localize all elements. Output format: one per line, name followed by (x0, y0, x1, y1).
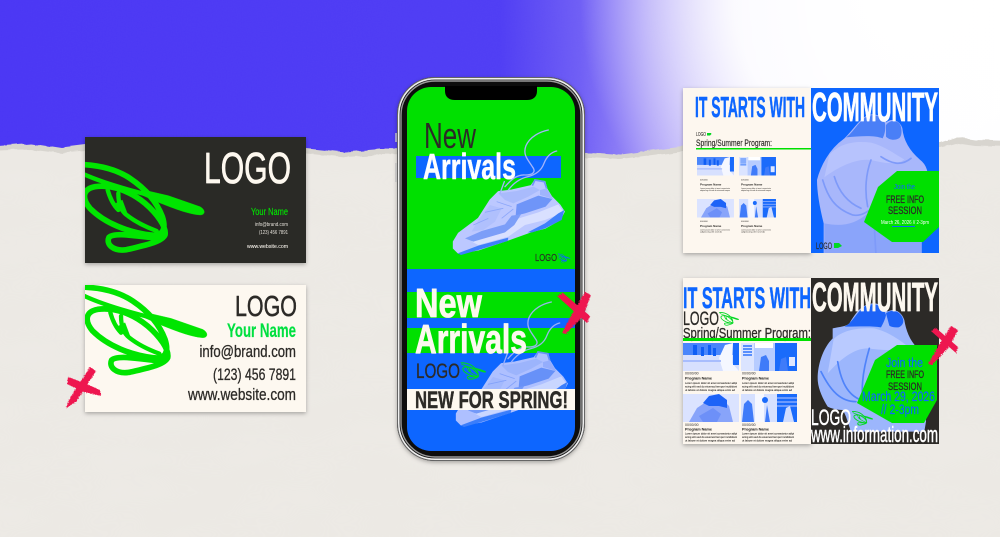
program listings: adipiscing elit sed do eiusmod tempor (700, 189, 730, 192)
program listings: 00/00/00 (700, 180, 709, 182)
program listings: Program Name (741, 182, 763, 186)
program listings: adipiscing elit sed do eiusmod tempor (741, 189, 771, 192)
program listings: ut labore et dolore magna aliqua enim ad (742, 388, 792, 392)
text: new for spring: NEW FOR SPRING! (415, 387, 568, 414)
shoe (453, 130, 564, 255)
contact text: dark card (246, 207, 288, 250)
icon: red x, phone (557, 292, 591, 334)
program listings: scing elit sed do eiusmod tempor incididunt (742, 435, 794, 439)
photo: embracing couple (818, 303, 926, 432)
right page (810, 274, 939, 447)
business card: light (78, 285, 306, 412)
icon: green scribble (720, 312, 739, 325)
program listings: Lorem ipsum dolor sit amet consectetur (741, 228, 771, 232)
program thumbnails (683, 343, 797, 422)
program listings: scing elit sed do eiusmod tempor incididunt (685, 435, 737, 439)
left page: IT STARTS WITH (695, 92, 805, 124)
heading: New: New (415, 280, 482, 326)
heading: Arrivals: Arrivals (423, 146, 516, 187)
callout: info session: SESSION (888, 381, 922, 393)
program listings: Program Name (700, 224, 722, 228)
contact text: dark card: Your Name (251, 207, 288, 218)
logo: LOGO (816, 241, 832, 251)
logo: LOGO (696, 132, 706, 138)
heading: New: New (424, 115, 477, 156)
program listings: Program Name (742, 428, 769, 432)
program listings: Lorem ipsum dolor sit amet consectetur adipi (685, 432, 737, 436)
callout: info session: // 2-3pm (881, 401, 919, 417)
poster spread: blue (683, 84, 939, 257)
band: new for spring (407, 389, 575, 410)
notch (445, 86, 537, 100)
program listings: Program Name (700, 182, 722, 186)
callout: info session: Join the (894, 184, 915, 191)
blue title bar (416, 156, 561, 178)
program listings: adipiscing elit sed do (741, 230, 765, 234)
photo: embracing couple (818, 115, 927, 257)
contact text: dark card: www.website.com (246, 244, 288, 250)
scribble: dark card (75, 164, 204, 250)
program listings: 00/00/00 (742, 372, 756, 376)
callout: info session: SESSION (888, 205, 922, 217)
logo small: LOGO (535, 252, 557, 264)
contact text: light card: info@brand.com (200, 342, 296, 361)
logo: LOGO (416, 360, 460, 383)
program listings (685, 372, 794, 442)
program listings: Program Name (685, 376, 712, 380)
subheading: program: Spring/Summer Program: (683, 325, 811, 342)
program listings: adipiscing elit sed do (700, 230, 722, 234)
program listings: Program Name (685, 428, 712, 432)
icon: red x, business card (66, 367, 101, 408)
program listings: 00/00/00 (685, 372, 699, 376)
callout: info session: FREE INFO (886, 194, 924, 206)
contact text: light card: www.website.com (187, 385, 296, 404)
logo: light card: LOGO (235, 291, 297, 323)
icon: red x, poster (928, 326, 958, 365)
program listings: Lorem ipsum dolor sit amet consectetur adipi (685, 381, 737, 385)
icon: green scribble (461, 363, 486, 379)
phone frame (396, 77, 585, 461)
business card: dark (75, 137, 306, 263)
background: torn paper (0, 137, 1000, 537)
program listings (700, 180, 771, 234)
program listings: ut labore et dolore magna aliqua enim ad (685, 438, 735, 442)
program listings: 00/00/00 (700, 221, 709, 223)
logo: dark card: LOGO (204, 144, 291, 193)
heading: it starts with: IT STARTS WITH (683, 282, 811, 315)
contact text: dark card: (123) 456 7891 (259, 230, 288, 236)
contact text: light card: Your Name (227, 321, 296, 342)
phone screen (407, 87, 575, 451)
program listings: Lorem ipsum dolor sit amet consectetur adipi (742, 381, 794, 385)
icon: green scribble (852, 411, 873, 425)
left page (683, 88, 811, 253)
heading: Arrivals: Arrivals (415, 316, 527, 362)
program listings: Lorem ipsum dolor sit amet consectetur (741, 187, 771, 190)
program listings: Lorem ipsum dolor sit amet consectetur (700, 228, 730, 232)
program listings: Program Name (741, 224, 763, 228)
program listings: 00/00/00 (741, 221, 750, 223)
callout: info session: FREE INFO (886, 369, 924, 381)
logo: LOGO (683, 309, 719, 330)
callout: info session (864, 171, 939, 242)
callout: info session: March 26, 2026 // 2-3pm (881, 220, 929, 226)
contact text: light card (187, 321, 296, 404)
logo: LOGO (811, 405, 851, 430)
program listings: ut labore et dolore magna aliqua enim ad (685, 388, 735, 392)
story: new arrivals blue (407, 269, 575, 451)
program listings: 00/00/00 (742, 423, 756, 427)
callout: info session: Join the (886, 355, 923, 370)
left page (683, 278, 811, 444)
program listings: 00/00/00 (685, 423, 699, 427)
background: purple gradient sky (0, 0, 1000, 180)
program listings: 00/00/00 (741, 180, 750, 182)
subheading: program: Spring/Summer Program: (696, 138, 772, 148)
poster spread: dark (683, 274, 939, 447)
callout: info session (857, 345, 937, 423)
program listings: Lorem ipsum dolor sit amet consectetur adipi (742, 432, 794, 436)
program listings: ut labore et dolore magna aliqua enim ad (742, 438, 792, 442)
phone (396, 77, 585, 461)
program listings: Program Name (742, 376, 769, 380)
icon: blue scribble (558, 254, 570, 262)
program listings: scing elit sed do eiusmod tempor incididunt (685, 384, 737, 388)
contact text: dark card: info@brand.com (255, 222, 288, 228)
program listings: Lorem ipsum dolor sit amet consectetur (700, 187, 730, 190)
contact text: light card: (123) 456 7891 (213, 365, 296, 384)
scribble: light card (78, 287, 207, 373)
program thumbnails (697, 157, 776, 217)
callout: info session: March 29, 2026 (862, 388, 935, 404)
shoe (456, 302, 567, 427)
program listings: scing elit sed do eiusmod tempor incididunt (742, 384, 794, 388)
right page (811, 84, 939, 257)
story: new arrivals green (416, 115, 570, 264)
